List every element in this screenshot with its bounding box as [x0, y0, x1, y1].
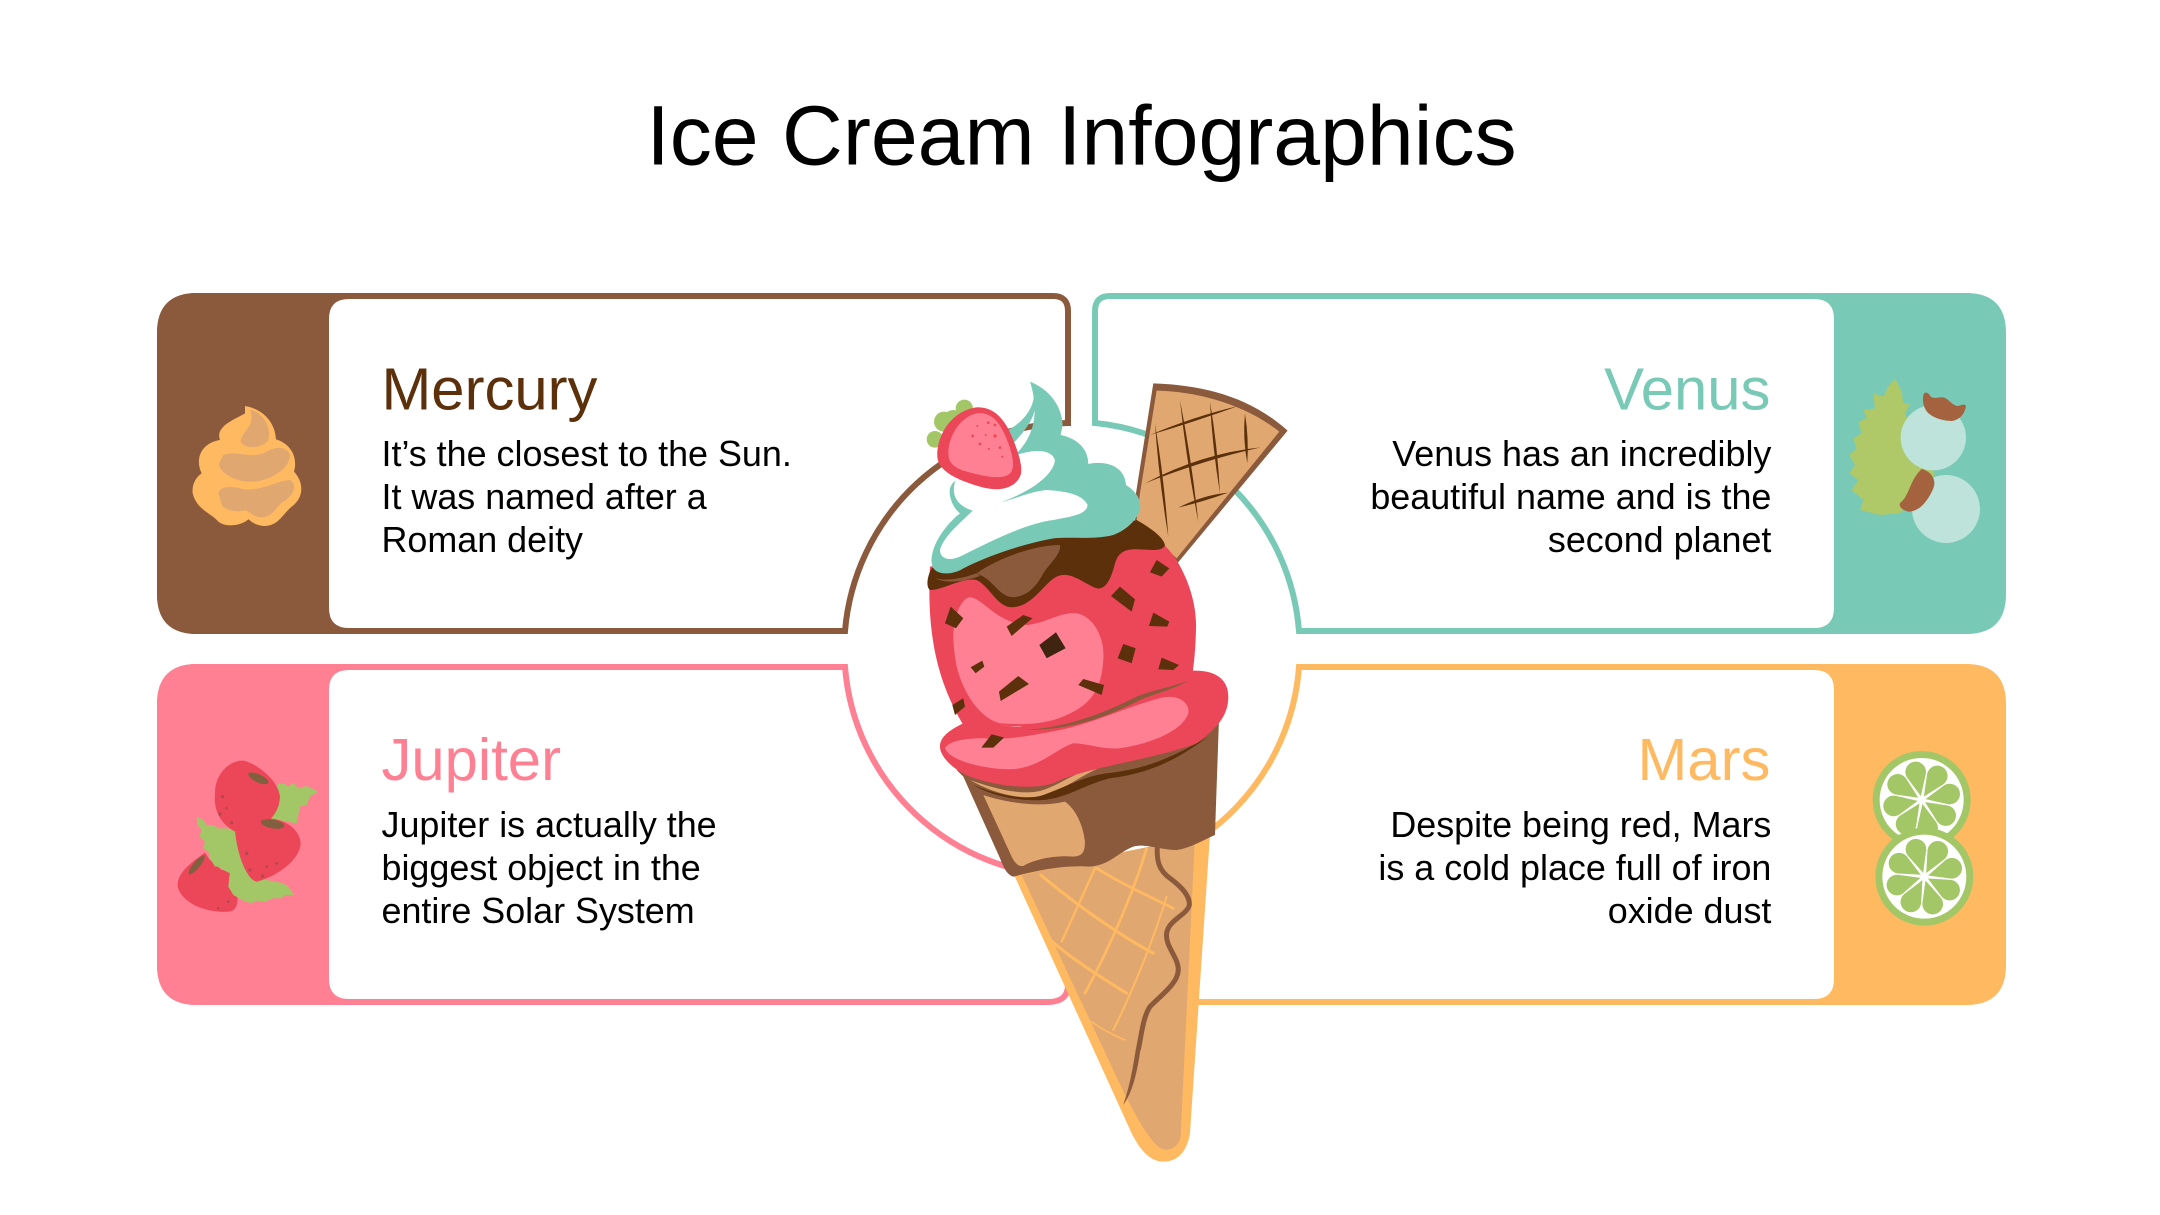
- ice cream cone illustration: [927, 382, 1288, 1162]
- title: Ice Cream Infographics: [646, 89, 1517, 183]
- Mercury body text: It’s the closest to the Sun.: [382, 434, 792, 474]
- Venus body text: second planet: [1548, 520, 1771, 560]
- strawberry topping: [927, 400, 1021, 489]
- panel: Jupiter: [157, 664, 1068, 1005]
- panel: Mercury: [157, 293, 1068, 634]
- Mercury body text: Roman deity: [382, 520, 583, 560]
- Jupiter body text: entire Solar System: [382, 891, 695, 931]
- Venus body text: beautiful name and is the: [1370, 477, 1771, 517]
- Jupiter body text: Jupiter is actually the: [382, 805, 717, 845]
- waffle cone: [1013, 835, 1210, 1162]
- panel: Mars: [1095, 664, 2006, 1005]
- icon: whipped cream: [193, 406, 301, 526]
- strawberry ice cream scoop: [929, 527, 1228, 787]
- panel: Venus: [1095, 293, 2006, 634]
- Venus heading: Venus: [1604, 356, 1770, 423]
- chocolate chips: [945, 560, 1179, 748]
- Mercury body text: It was named after a: [382, 477, 707, 517]
- Jupiter body text: biggest object in the: [382, 848, 701, 888]
- wafer biscuit: [1135, 383, 1288, 563]
- icon: strawberries: [178, 761, 318, 912]
- Mars body text: is a cold place full of iron: [1378, 848, 1771, 888]
- chocolate coating on cone: [957, 710, 1219, 877]
- Mars body text: oxide dust: [1608, 891, 1771, 931]
- Mars heading: Mars: [1638, 726, 1770, 793]
- Venus body text: Venus has an incredibly: [1392, 434, 1771, 474]
- Mercury heading: Mercury: [382, 356, 598, 423]
- icon: nuts and leaf: [1849, 378, 1980, 543]
- Mars body text: Despite being red, Mars: [1390, 805, 1771, 845]
- whipped cream: [932, 382, 1140, 573]
- Jupiter heading: Jupiter: [382, 726, 561, 793]
- icon: lime slices: [1873, 751, 1973, 926]
- chocolate sauce: [927, 520, 1165, 607]
